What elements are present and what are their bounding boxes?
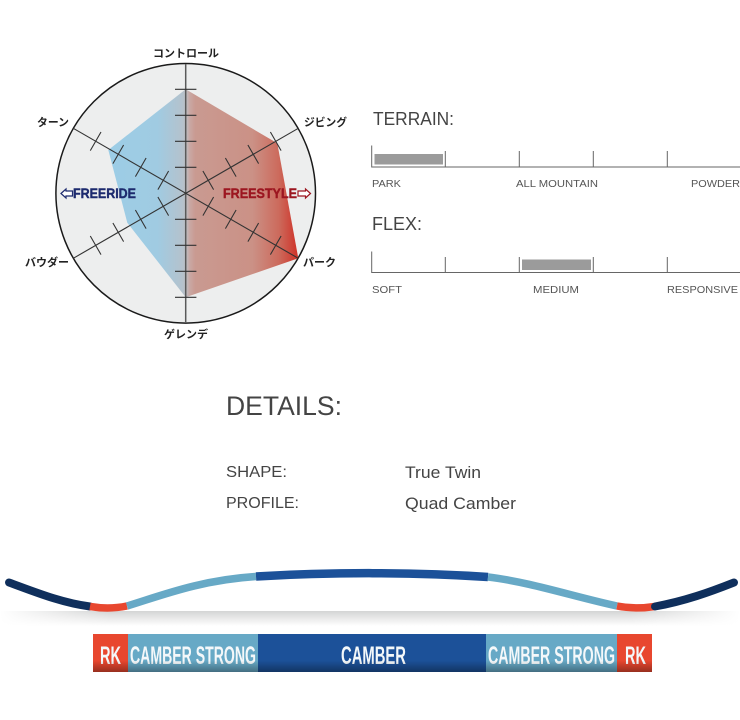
zone: left rocker — [93, 634, 128, 672]
zone: left camber strong — [128, 634, 258, 672]
zone: camber — [258, 634, 486, 672]
flex value bar — [522, 260, 591, 270]
flex axis — [372, 252, 740, 272]
axis label: jibbing: ジビング — [304, 115, 347, 129]
zone: right camber strong — [486, 634, 617, 672]
axis label: turn: ターン — [37, 116, 69, 129]
profile value: Quad Camber — [405, 494, 516, 513]
shape label: SHAPE: — [226, 464, 287, 481]
FREESTYLE label: FREESTYLE — [223, 186, 297, 201]
ground shadow — [0, 611, 740, 626]
profile label: PROFILE: — [226, 495, 299, 512]
right rocker — [617, 606, 655, 608]
terrain value bar — [374, 154, 443, 164]
left camber strong — [127, 576, 256, 606]
right tail — [655, 582, 734, 606]
radar chart — [25, 48, 347, 341]
zone: left rocker: RK — [100, 642, 121, 670]
zone: right rocker — [617, 634, 652, 672]
radar data polygon — [108, 89, 298, 297]
zone: right camber strong: CAMBER STRONG — [488, 642, 615, 670]
shape value: True Twin — [405, 463, 481, 482]
radar axes and ticks — [73, 64, 298, 323]
terrain label: park: PARK — [372, 178, 401, 190]
axis label: groomed: ゲレンデ — [164, 327, 208, 341]
zone: camber: CAMBER — [341, 642, 406, 670]
flex label: soft: SOFT — [372, 284, 403, 296]
board profile curve — [9, 573, 734, 608]
central camber — [256, 573, 488, 577]
axis label: control: コントロール — [153, 48, 219, 60]
terrain axis — [372, 146, 740, 167]
flex heading: FLEX: — [372, 214, 422, 234]
radar background circle — [56, 64, 316, 323]
right camber strong — [488, 577, 617, 606]
flex scale — [372, 214, 740, 296]
flex label: medium: MEDIUM — [533, 284, 579, 296]
details heading: DETAILS: — [226, 391, 342, 421]
FREERIDE label: FREERIDE — [73, 186, 136, 201]
terrain heading: TERRAIN: — [373, 109, 454, 129]
left rocker — [90, 606, 127, 608]
terrain label: powder: POWDER — [691, 178, 740, 190]
axis label: powder: バウダー — [25, 255, 69, 269]
details block — [226, 391, 516, 513]
terrain scale — [372, 109, 740, 190]
left nose — [9, 582, 90, 606]
zone: right rocker: RK — [625, 642, 646, 670]
flex label: responsive: RESPONSIVE — [667, 284, 738, 296]
terrain label: all mountain: ALL MOUNTAIN — [516, 178, 598, 190]
zone: left camber strong: CAMBER STRONG — [130, 642, 256, 670]
axis label: park: パーク — [303, 256, 336, 269]
camber zone legend bar — [93, 634, 652, 672]
